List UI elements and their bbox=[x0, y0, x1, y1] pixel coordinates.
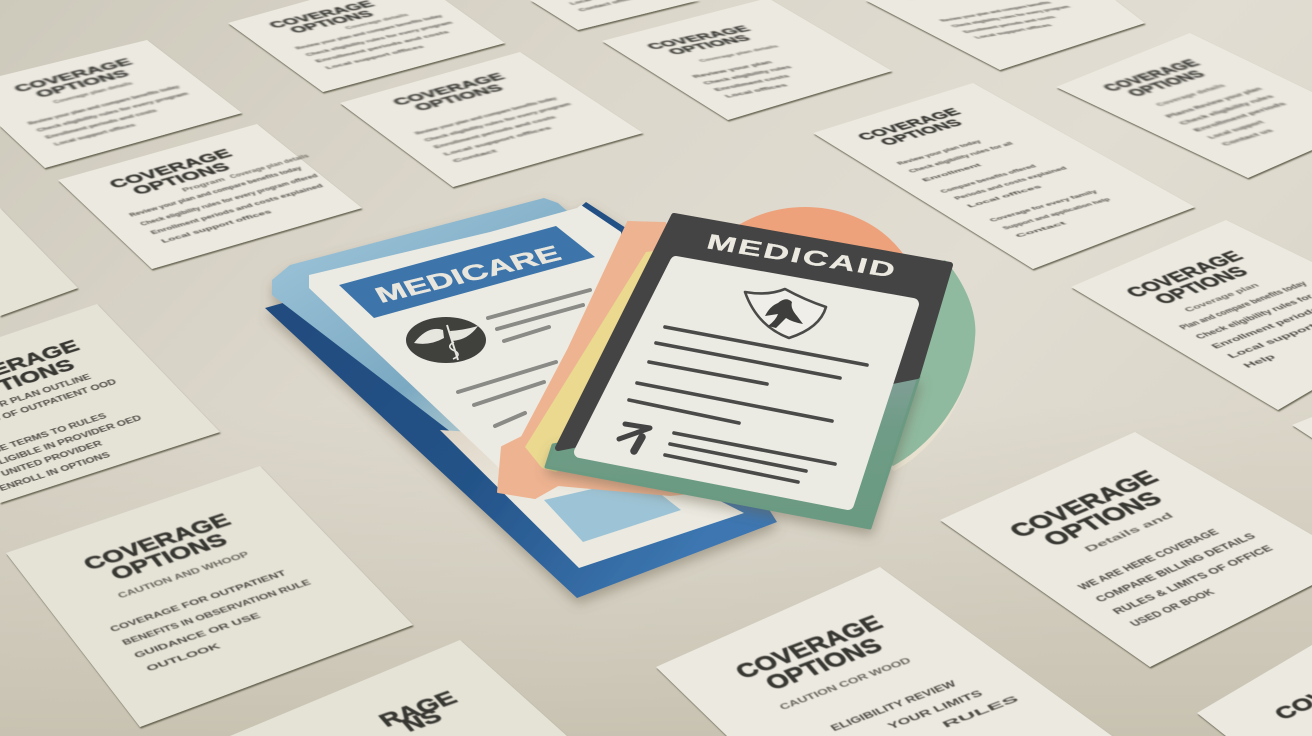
card: left middle bbox=[0, 304, 220, 503]
folder: green bbox=[546, 377, 919, 528]
card text: Local support bbox=[1225, 323, 1312, 360]
shape: cream circle edge bbox=[800, 262, 974, 471]
card text bbox=[95, 130, 348, 245]
card text: COVERAGE bbox=[731, 612, 888, 683]
card text: Details and bbox=[1082, 511, 1176, 554]
paper: medicare sheet bbox=[309, 205, 640, 500]
card text bbox=[731, 592, 1021, 736]
card: far right top bbox=[1056, 33, 1312, 178]
card text: COVERAGE bbox=[11, 56, 135, 94]
folder: peach bbox=[498, 222, 720, 498]
banner: medicare bbox=[339, 226, 595, 318]
card text: Enrollment periods and costs bbox=[314, 30, 451, 64]
card text: OPTIONS bbox=[128, 160, 233, 197]
card text: NS bbox=[397, 705, 447, 736]
card text: COVERAGE bbox=[105, 146, 236, 191]
folder: yellow bbox=[525, 250, 662, 472]
card text bbox=[1098, 54, 1312, 149]
card text: Review your plan bbox=[1191, 86, 1265, 110]
card text: OPTIONS bbox=[761, 635, 888, 695]
card: top right bbox=[865, 0, 1145, 70]
card text: OPTIONS bbox=[1122, 68, 1209, 99]
card text bbox=[1122, 243, 1312, 371]
card text: Enrollment costs bbox=[713, 74, 792, 92]
card text: Review your plan and compare benefits today bbox=[295, 14, 445, 51]
card text: COVERAGE bbox=[1098, 57, 1204, 94]
card text: Coverage plan details bbox=[698, 44, 781, 63]
card text: Check eligibility rules for every program bbox=[422, 101, 573, 143]
card text: Plans bbox=[1163, 106, 1197, 119]
paper: medicaid sheet bbox=[580, 262, 913, 504]
card: right middle bbox=[1071, 220, 1312, 410]
card text bbox=[377, 64, 598, 164]
card text: Review your plan and compare benefits today bbox=[26, 84, 182, 126]
card text: Coverage details bbox=[1155, 84, 1228, 107]
card text: OPTIONS bbox=[665, 34, 755, 57]
card text bbox=[0, 52, 205, 148]
card text: OPTIONS bbox=[1150, 264, 1253, 307]
card text bbox=[0, 333, 159, 500]
card: top centre left bbox=[340, 52, 643, 187]
card text: Enrollment periods bbox=[1191, 101, 1288, 133]
icon: arrow mark bbox=[619, 424, 650, 451]
card text: Check eligibility rules bbox=[703, 65, 794, 86]
folder: light blue layer bbox=[272, 198, 620, 478]
folder: dark header card bbox=[558, 216, 950, 448]
card text: OPTIONS bbox=[1038, 488, 1168, 550]
card: lower right bbox=[940, 432, 1312, 667]
card text: Contact us bbox=[1219, 128, 1275, 147]
card text: OPTIONS bbox=[106, 530, 232, 584]
card text: Check eligibility rules for every program bbox=[305, 21, 454, 57]
card text: Check eligibility rules for every program offered bbox=[138, 173, 319, 227]
card text: Check eligibility rules bbox=[1177, 94, 1276, 126]
card text bbox=[1002, 460, 1292, 630]
card text: Enrollment periods and costs bbox=[44, 108, 159, 140]
card: top left bbox=[0, 40, 242, 168]
card text: Contact bbox=[1013, 220, 1069, 238]
card: bottom left large bbox=[6, 466, 413, 727]
card text: Coverage plan details bbox=[51, 80, 134, 104]
card text: Review your plan and compare benefits today bbox=[413, 95, 559, 136]
card text: COVERAGE bbox=[79, 510, 235, 574]
card text: GUIDANCE OR USE bbox=[133, 612, 263, 660]
card text: Enrollment periods and costs explained bbox=[149, 183, 325, 235]
card text: ENROLL IN OPTIONS bbox=[0, 451, 113, 493]
card text: Enrollment periods bbox=[1209, 306, 1312, 350]
card text: OUTLOOK bbox=[145, 642, 223, 673]
medicaid document stack bbox=[498, 216, 950, 528]
card text: Coverage details bbox=[344, 13, 411, 30]
card text: Local support offices bbox=[324, 45, 426, 70]
card text: COVERAGE bbox=[1004, 467, 1164, 542]
card text: Review your plan today bbox=[894, 138, 983, 166]
card text: Local offices bbox=[965, 184, 1044, 209]
card text bbox=[58, 502, 335, 675]
card text: CAUTION COR WOOD bbox=[778, 656, 914, 712]
card text: Review your plan bbox=[692, 60, 774, 79]
card text: RAGE bbox=[374, 687, 462, 731]
medicare document stack bbox=[265, 198, 777, 598]
card text: COVERAGE bbox=[854, 106, 965, 143]
header label: MEDICAID bbox=[704, 231, 900, 283]
card text: COMPARE BILLING DETAILS bbox=[1093, 532, 1259, 604]
card text: Coverage plan bbox=[1182, 281, 1261, 313]
card text: Check eligibility rules for all bbox=[906, 141, 1015, 174]
card text: Local support offices bbox=[159, 209, 274, 244]
card: top second bbox=[228, 0, 505, 92]
card text: YOUR LIMITS bbox=[886, 689, 985, 731]
card: upper right large bbox=[813, 83, 1195, 269]
icon: shield bbox=[745, 289, 826, 338]
card text: RULES bbox=[940, 694, 1021, 730]
card text: Local offices bbox=[724, 83, 789, 99]
icon: caduceus badge bbox=[406, 317, 486, 363]
card text: ELIGIBILITY REVIEW bbox=[829, 679, 960, 733]
card text: Support and application help bbox=[1000, 196, 1113, 231]
card text: Coverage plan details bbox=[228, 153, 311, 180]
card: left edge sliver bbox=[0, 208, 78, 316]
card text: Check eligibility rules for every program bbox=[35, 91, 190, 133]
paper: light blue lower tab bbox=[544, 478, 681, 542]
text lines: medicare bbox=[458, 290, 590, 426]
card text: Enrollment bbox=[920, 162, 984, 183]
card text: Review your plan and compare benefits today bbox=[128, 165, 304, 218]
card text: COVERAGE bbox=[644, 24, 754, 52]
card text: Contact bbox=[451, 148, 499, 163]
card text: WE ARE HERE COVERAGE bbox=[1076, 527, 1222, 592]
card: bottom right corner bbox=[1197, 645, 1312, 736]
card: top centre right bbox=[602, 0, 892, 120]
card text bbox=[262, 0, 472, 71]
card text: Local support offices bbox=[441, 125, 553, 157]
card text: OPTIONS bbox=[411, 82, 507, 113]
card text: USED OR BOOK bbox=[1128, 588, 1218, 629]
card text: Enrollment periods and costs bbox=[962, 15, 1058, 34]
card text: OPTIONS bbox=[876, 117, 966, 148]
paper: lower sheet bbox=[440, 430, 744, 568]
card text: OPTIONS bbox=[32, 68, 132, 100]
folder: navy back bbox=[265, 202, 777, 598]
card text: RULES & LIMITS OF OFFICE bbox=[1111, 544, 1276, 616]
card text bbox=[644, 24, 827, 99]
card text: BENEFITS IN OBSERVATION RULE bbox=[121, 578, 313, 647]
card: bottom edge bbox=[230, 640, 567, 736]
card: right edge sliver bbox=[1292, 417, 1312, 438]
card text: Help bbox=[1241, 353, 1278, 369]
card text: COVERAGE bbox=[1122, 249, 1248, 301]
card text: Enrollment periods and costs bbox=[432, 114, 558, 150]
card text: Check eligibility rules for bbox=[1193, 293, 1312, 340]
card text: Check eligibility rules for every program bbox=[950, 5, 1072, 28]
card text: COVERAGE bbox=[266, 0, 378, 30]
banner label: MEDICARE bbox=[371, 241, 566, 308]
shape: green circle bbox=[800, 260, 975, 466]
card text bbox=[894, 0, 1094, 40]
card text: Coverage for every family bbox=[987, 189, 1099, 223]
card text: COVERAGE bbox=[389, 71, 508, 108]
card text: Local support offices bbox=[52, 122, 137, 147]
card: top edge sliver bbox=[530, 0, 700, 30]
card text: OPTIONS bbox=[287, 9, 377, 35]
card text bbox=[853, 102, 1127, 240]
card: bottom centre bbox=[656, 567, 1112, 736]
text lines: medicaid bbox=[629, 327, 867, 482]
card text: Program bbox=[180, 176, 227, 193]
card text: Local support offices bbox=[973, 23, 1055, 40]
card text: Compare benefits offered bbox=[938, 163, 1038, 194]
card text: Periods and costs explained bbox=[952, 165, 1069, 201]
card text: COVERAGE FOR OUTPATIENT bbox=[108, 569, 289, 634]
card: upper left second bbox=[58, 124, 362, 269]
shape: peach circle bbox=[690, 207, 920, 403]
card text: Local support bbox=[1205, 119, 1266, 140]
card text: CAUTION AND WHOOP bbox=[116, 550, 252, 600]
